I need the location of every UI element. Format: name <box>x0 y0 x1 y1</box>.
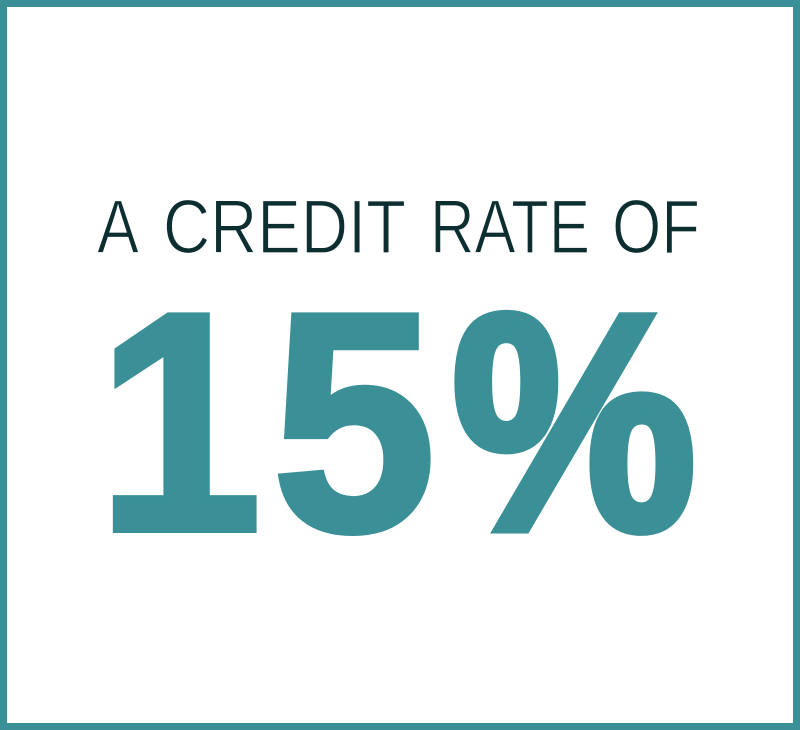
heading: a credit rate of: CREDIT <box>163 185 406 270</box>
big number: 15%: 1 <box>97 249 262 597</box>
big number: 15%: % <box>452 252 696 594</box>
heading: a credit rate of: RATE <box>430 185 590 270</box>
big number: 15%: 5 <box>272 249 436 597</box>
big number: 15% <box>97 249 696 597</box>
heading: a credit rate of: OF <box>612 185 700 270</box>
heading: a credit rate of <box>97 185 700 270</box>
heading: a credit rate of: A <box>97 185 139 270</box>
